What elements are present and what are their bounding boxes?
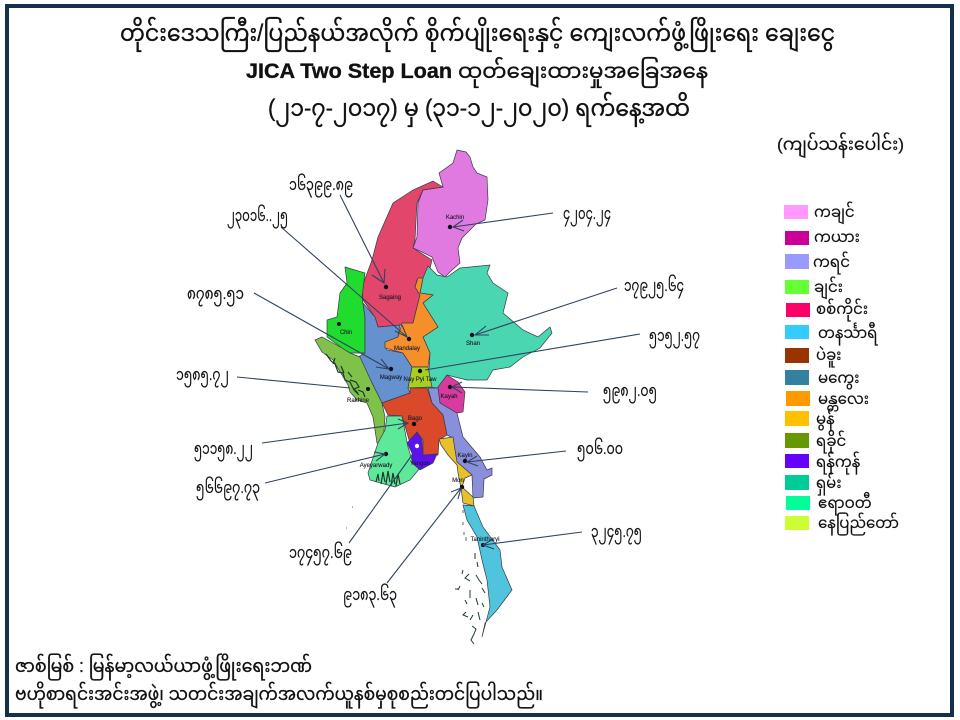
legend names: ကယား (814, 229, 860, 246)
region values: ၅၁၅၂.၅၇ (649, 328, 700, 349)
arrow: Kayah (452, 382, 588, 393)
arrow: Ayeyarwady (265, 452, 385, 483)
arrow: Sagaing (340, 195, 385, 283)
region names: Rakhine (347, 398, 370, 404)
region: Mandalay (385, 278, 438, 367)
region names: Mandalay (394, 346, 420, 352)
legend names (813, 202, 899, 535)
arrow: Tanintharyi (483, 532, 582, 549)
legend (784, 202, 899, 535)
legend names: ရန်ကုန် (816, 452, 861, 474)
arrow: Nay Pyi Taw (425, 334, 640, 370)
region values: ၉၁၈၃.၆၃ (343, 583, 397, 608)
legend names: ဧရာဝတီ (818, 493, 872, 515)
region: Kayin (428, 388, 492, 498)
region: Chin (327, 267, 365, 353)
region: Shan (420, 265, 552, 388)
arrow: Mandalay (281, 227, 407, 337)
arrow: Rakhine (237, 377, 350, 388)
region: Nay Pyi Taw (408, 367, 432, 388)
legend names: ကချင် (814, 202, 855, 224)
legend swatches (784, 205, 810, 530)
arrow: Kayin (467, 451, 566, 466)
legend names: ရှမ်း (816, 473, 842, 495)
legend names: မွန် (816, 409, 835, 431)
region names: Kayin (457, 453, 473, 459)
region names: Bago (408, 416, 423, 422)
region names (340, 215, 500, 543)
region: Magway (358, 303, 412, 403)
region names: Shan (466, 341, 480, 347)
region: Bago (382, 388, 447, 455)
legend names: တနင်္သာရီ (818, 323, 878, 345)
region: Rakhine (315, 337, 385, 443)
legend names: နေပြည်တော် (818, 513, 899, 535)
coastal islands (326, 354, 400, 486)
region values: ၄၂၀၄.၂၄ (563, 206, 611, 227)
region names: Mon (452, 478, 464, 484)
region values: ၁၇၉၂၅.၆၄ (624, 274, 684, 299)
title: JICA Two Step Loan ထုတ်ချေးထားမှုအခြေအနေ (246, 55, 708, 89)
arrow: Kachin (453, 213, 553, 231)
arrow: Magway (254, 293, 389, 369)
region: Tanintharyi (463, 505, 512, 637)
legend names: ပဲခူး (816, 347, 841, 367)
region: Kachin (413, 150, 488, 277)
region values: ၃၂၄၅.၇၅ (591, 524, 642, 545)
region values: ၅၀၆.၀၀ (577, 437, 623, 462)
legend names: စစ်ကိုင်း (816, 299, 868, 321)
region values: ၁၇၄၅၇.၆၉ (289, 541, 352, 566)
map of Myanmar regions (315, 150, 552, 644)
region names: Kachin (446, 215, 464, 221)
region values: ၂၃၀၁၆..၂၅ (227, 204, 288, 229)
region: Sagaing (362, 181, 443, 327)
region names: Chin (340, 330, 352, 336)
source note: ဗဟိုစာရင်းအင်းအဖွဲ့၊ သတင်းအချက်အလက်ယူနစ်မှစုစည်းတင်ပြပါသည်။ (15, 680, 543, 709)
region values: ၅၉၈၂.၀၅ (603, 383, 657, 404)
region names: Kayah (440, 394, 458, 400)
region names: Sagaing (379, 295, 401, 301)
region values (176, 173, 700, 608)
region values: ၁၅၈၅.၇၂ (176, 367, 229, 388)
title: တိုင်းဒေသကြီး/ပြည်နယ်အလိုက် စိုက်ပျိုးရေးနှင့် ကျေးလက်ဖွံ့ဖြိုးရေး ချေးငွေ (120, 17, 835, 52)
region values: ၈၇၈၅.၅၁ (187, 286, 244, 307)
region names: Nay Pyi Taw (404, 377, 437, 383)
arrow: Mon (387, 488, 461, 583)
region: Kayah (438, 375, 465, 413)
title: (၂၁-၇-၂၀၁၇) မှ (၃၁-၁၂-၂၀၂၀) ရက်နေ့အထိ (268, 92, 690, 127)
source note (15, 652, 543, 709)
region: Yangon (407, 432, 437, 470)
legend names: ရခိုင် (816, 431, 846, 453)
unit note: (ကျပ်သန်းပေါင်း) (777, 133, 904, 158)
region: Mon (439, 437, 474, 506)
legend names: ကရင် (813, 252, 850, 274)
region names: Yangon (410, 461, 430, 467)
arrow: Yangon (349, 455, 412, 543)
arrow: Shan (475, 288, 617, 335)
legend names: မန္တလေး (818, 391, 869, 411)
region: Ayeyarwady (368, 416, 420, 487)
region names: Magway (380, 375, 402, 381)
region values: ၁၆၃၉၉.၈၉ (289, 173, 353, 198)
capital dots (337, 225, 485, 547)
source note: ဇာစ်မြစ် : မြန်မာ့လယ်ယာဖွံ့ဖြိုးရေးဘဏ် (15, 652, 312, 681)
region names: Ayeyarwady (360, 463, 392, 469)
legend names: ချင်း (814, 277, 843, 299)
title (120, 17, 835, 127)
region values: ၅၆၆၉၇.၇၃ (196, 476, 260, 501)
region values: ၅၁၁၅၈.၂၂ (194, 441, 253, 462)
legend names: မကွေး (818, 370, 859, 389)
arrow: Bago (262, 419, 408, 443)
arrows from values to regions (237, 195, 640, 583)
region names: Tanintharyi (470, 537, 500, 543)
